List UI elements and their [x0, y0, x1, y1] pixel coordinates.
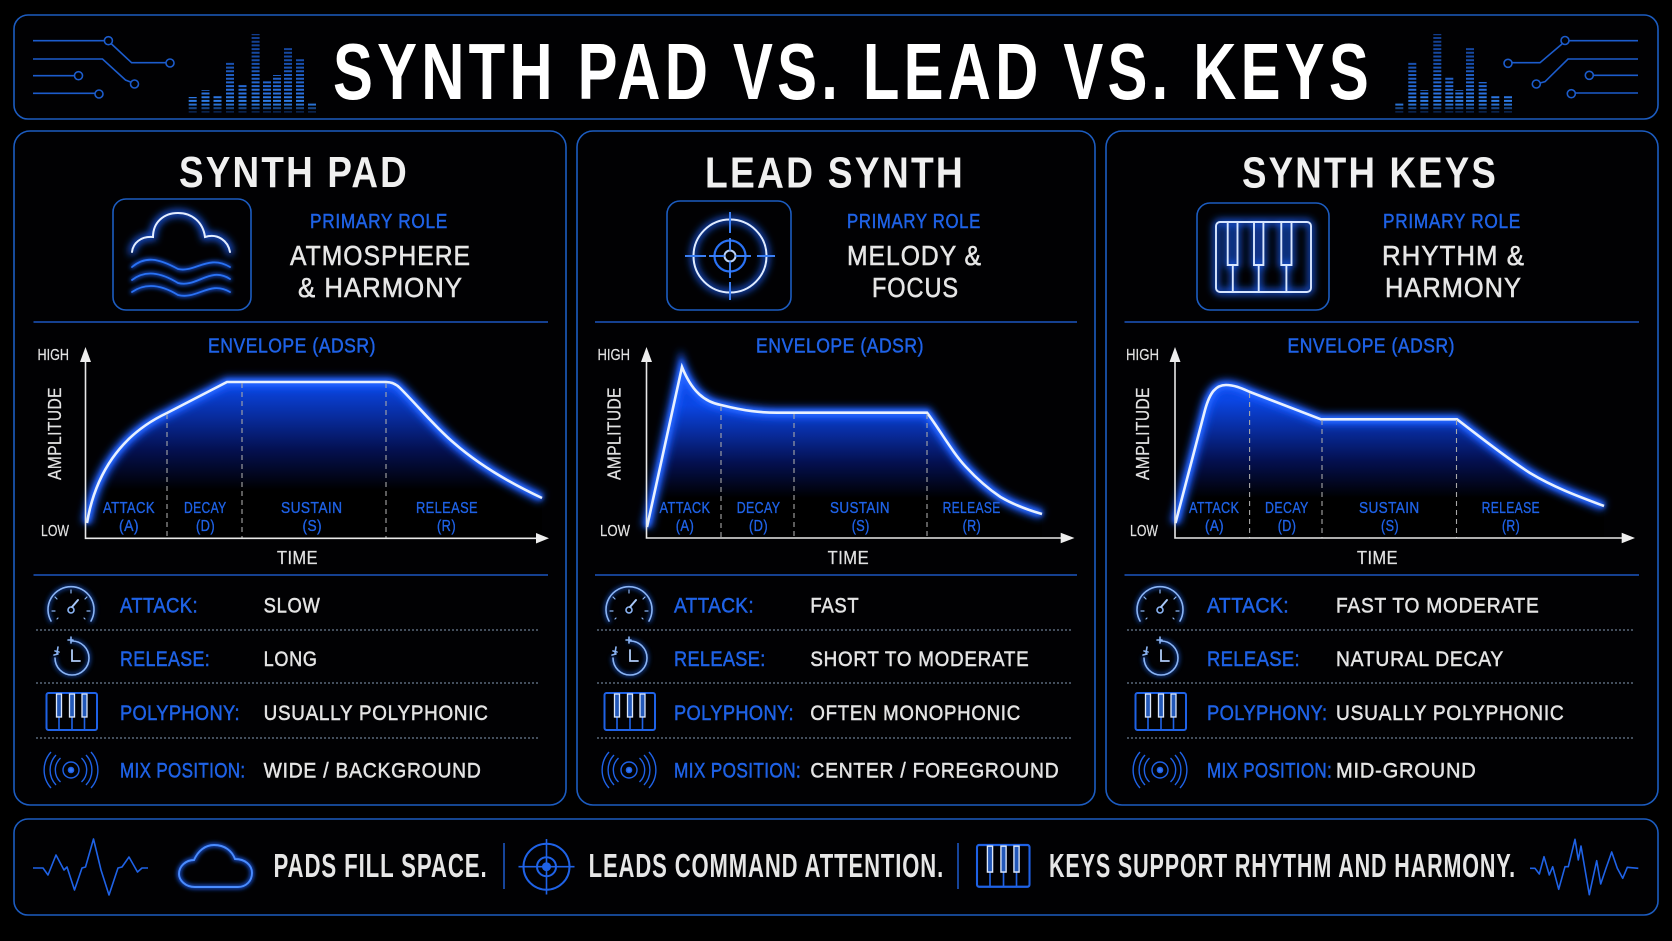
- primary role: ATMOSPHERE: [290, 240, 471, 271]
- panel frame: [1106, 131, 1658, 805]
- left circuit decoration: [33, 37, 174, 98]
- envelope chart: (D): [749, 518, 768, 535]
- row: attack: ATTACK:: [1207, 595, 1289, 618]
- row: polyphony: POLYPHONY:: [1207, 702, 1328, 725]
- row: release: LONG: [264, 648, 318, 671]
- envelope chart: ENVELOPE (ADSR): [756, 334, 924, 358]
- right equalizer decoration: [1399, 34, 1508, 113]
- envelope chart: AMPLITUDE: [1133, 387, 1153, 480]
- row: release: NATURAL DECAY: [1336, 648, 1504, 671]
- left waveform: [33, 839, 148, 895]
- row: mix position: MIX POSITION:: [1207, 760, 1332, 782]
- row: release: [54, 637, 318, 675]
- icon: piano keys: [977, 845, 1030, 887]
- footer panel: [14, 819, 1658, 915]
- row: mix position: WIDE / BACKGROUND: [264, 760, 482, 782]
- envelope chart: ATTACK: [660, 500, 711, 517]
- envelope chart: (R): [1502, 518, 1520, 535]
- envelope chart: DECAY: [737, 500, 780, 517]
- panel: synth pad: [14, 131, 566, 805]
- panel heading: SYNTH KEYS: [1242, 148, 1498, 198]
- envelope chart: ENVELOPE (ADSR): [208, 334, 376, 358]
- envelope chart: [1126, 334, 1635, 568]
- row: polyphony: [1136, 693, 1564, 730]
- row: attack: ATTACK:: [120, 595, 198, 618]
- row: polyphony: [604, 693, 1021, 730]
- envelope chart: AMPLITUDE: [45, 387, 65, 480]
- envelope chart: (R): [963, 518, 981, 535]
- panel: lead synth: [577, 131, 1095, 805]
- row: release: RELEASE:: [674, 648, 766, 671]
- row: polyphony: [46, 693, 489, 730]
- envelope chart: DECAY: [1265, 500, 1309, 517]
- envelope chart: (R): [437, 518, 456, 535]
- primary role: PRIMARY ROLE: [847, 211, 981, 233]
- envelope chart: TIME: [277, 548, 318, 568]
- row: mix position: MID-GROUND: [1336, 760, 1476, 782]
- row: attack: [606, 587, 859, 621]
- envelope chart: [598, 334, 1074, 568]
- footer frame: [14, 819, 1658, 915]
- panel frame: [14, 131, 566, 805]
- right waveform: [1530, 839, 1638, 895]
- primary role: [1382, 211, 1525, 303]
- envelope chart: (S): [852, 518, 870, 535]
- header panel: [14, 15, 1658, 119]
- envelope chart: RELEASE: [1482, 500, 1540, 517]
- envelope chart: TIME: [828, 548, 869, 568]
- row: mix position: MIX POSITION:: [674, 760, 801, 782]
- row: attack: SLOW: [264, 595, 321, 618]
- row: release: SHORT TO MODERATE: [810, 648, 1029, 671]
- panel heading: LEAD SYNTH: [705, 148, 965, 198]
- row: release: [1143, 637, 1504, 675]
- envelope chart: HIGH: [38, 347, 69, 364]
- primary role: MELODY &: [847, 240, 982, 271]
- envelope chart: HIGH: [598, 347, 630, 364]
- envelope chart: (A): [1205, 518, 1224, 535]
- row: mix position: [602, 752, 1059, 788]
- row: attack: FAST: [810, 595, 859, 618]
- primary role: [847, 211, 982, 303]
- primary role: PRIMARY ROLE: [310, 211, 448, 233]
- envelope chart: (S): [1381, 518, 1399, 535]
- row: release: RELEASE:: [120, 648, 210, 671]
- envelope chart: LOW: [41, 523, 69, 540]
- row: polyphony: POLYPHONY:: [674, 702, 794, 725]
- row: polyphony: OFTEN MONOPHONIC: [810, 702, 1021, 725]
- panel heading: SYNTH PAD: [179, 148, 409, 197]
- envelope chart: SUSTAIN: [281, 500, 342, 517]
- row: polyphony: USUALLY POLYPHONIC: [1336, 702, 1564, 725]
- row: polyphony: POLYPHONY:: [120, 702, 240, 725]
- statement: pads: PADS FILL SPACE.: [274, 847, 488, 884]
- row: mix position: [1133, 752, 1476, 788]
- panel: synth keys: [1106, 131, 1658, 805]
- icon: cloud: [179, 845, 252, 887]
- primary role: RHYTHM &: [1382, 240, 1525, 271]
- envelope chart: [38, 334, 549, 568]
- envelope chart: SUSTAIN: [1359, 500, 1420, 517]
- row: mix position: CENTER / FOREGROUND: [810, 760, 1059, 782]
- icon: cloud over waves: [113, 199, 251, 310]
- envelope chart: ATTACK: [103, 500, 155, 517]
- row: mix position: MIX POSITION:: [120, 760, 246, 782]
- header frame: [14, 15, 1658, 119]
- row: attack: ATTACK:: [674, 595, 754, 618]
- envelope chart: (A): [119, 518, 139, 535]
- icon: piano keys: [1197, 203, 1329, 310]
- icon: target: [667, 201, 791, 310]
- row: release: [612, 637, 1029, 675]
- envelope chart: DECAY: [184, 500, 226, 517]
- statement: leads: LEADS COMMAND ATTENTION.: [589, 847, 944, 884]
- envelope chart: ENVELOPE (ADSR): [1288, 334, 1455, 358]
- envelope chart: RELEASE: [943, 500, 1001, 517]
- primary role: & HARMONY: [298, 272, 463, 303]
- row: release: RELEASE:: [1207, 648, 1300, 671]
- row: mix position: [44, 752, 482, 788]
- envelope chart: (D): [196, 518, 215, 535]
- envelope chart: TIME: [1357, 548, 1398, 568]
- row: attack: FAST TO MODERATE: [1336, 595, 1540, 618]
- primary role: PRIMARY ROLE: [1383, 211, 1521, 233]
- row: polyphony: USUALLY POLYPHONIC: [264, 702, 489, 725]
- envelope chart: AMPLITUDE: [604, 387, 624, 480]
- right circuit decoration: [1504, 36, 1638, 98]
- envelope chart: LOW: [600, 523, 630, 540]
- envelope chart: (S): [302, 518, 322, 535]
- primary role: FOCUS: [872, 272, 959, 303]
- envelope chart: LOW: [1130, 523, 1158, 540]
- primary role: HARMONY: [1385, 272, 1522, 303]
- panel frame: [577, 131, 1095, 805]
- envelope chart: HIGH: [1126, 347, 1159, 364]
- icon: target: [518, 839, 574, 894]
- primary role: [290, 211, 471, 303]
- envelope chart: SUSTAIN: [830, 500, 890, 517]
- left equalizer decoration: [193, 34, 312, 113]
- envelope chart: (D): [1278, 518, 1296, 535]
- envelope chart: (A): [676, 518, 694, 535]
- envelope chart: ATTACK: [1189, 500, 1240, 517]
- row: attack: [48, 587, 321, 621]
- envelope chart: RELEASE: [416, 500, 478, 517]
- row: attack: [1137, 587, 1540, 621]
